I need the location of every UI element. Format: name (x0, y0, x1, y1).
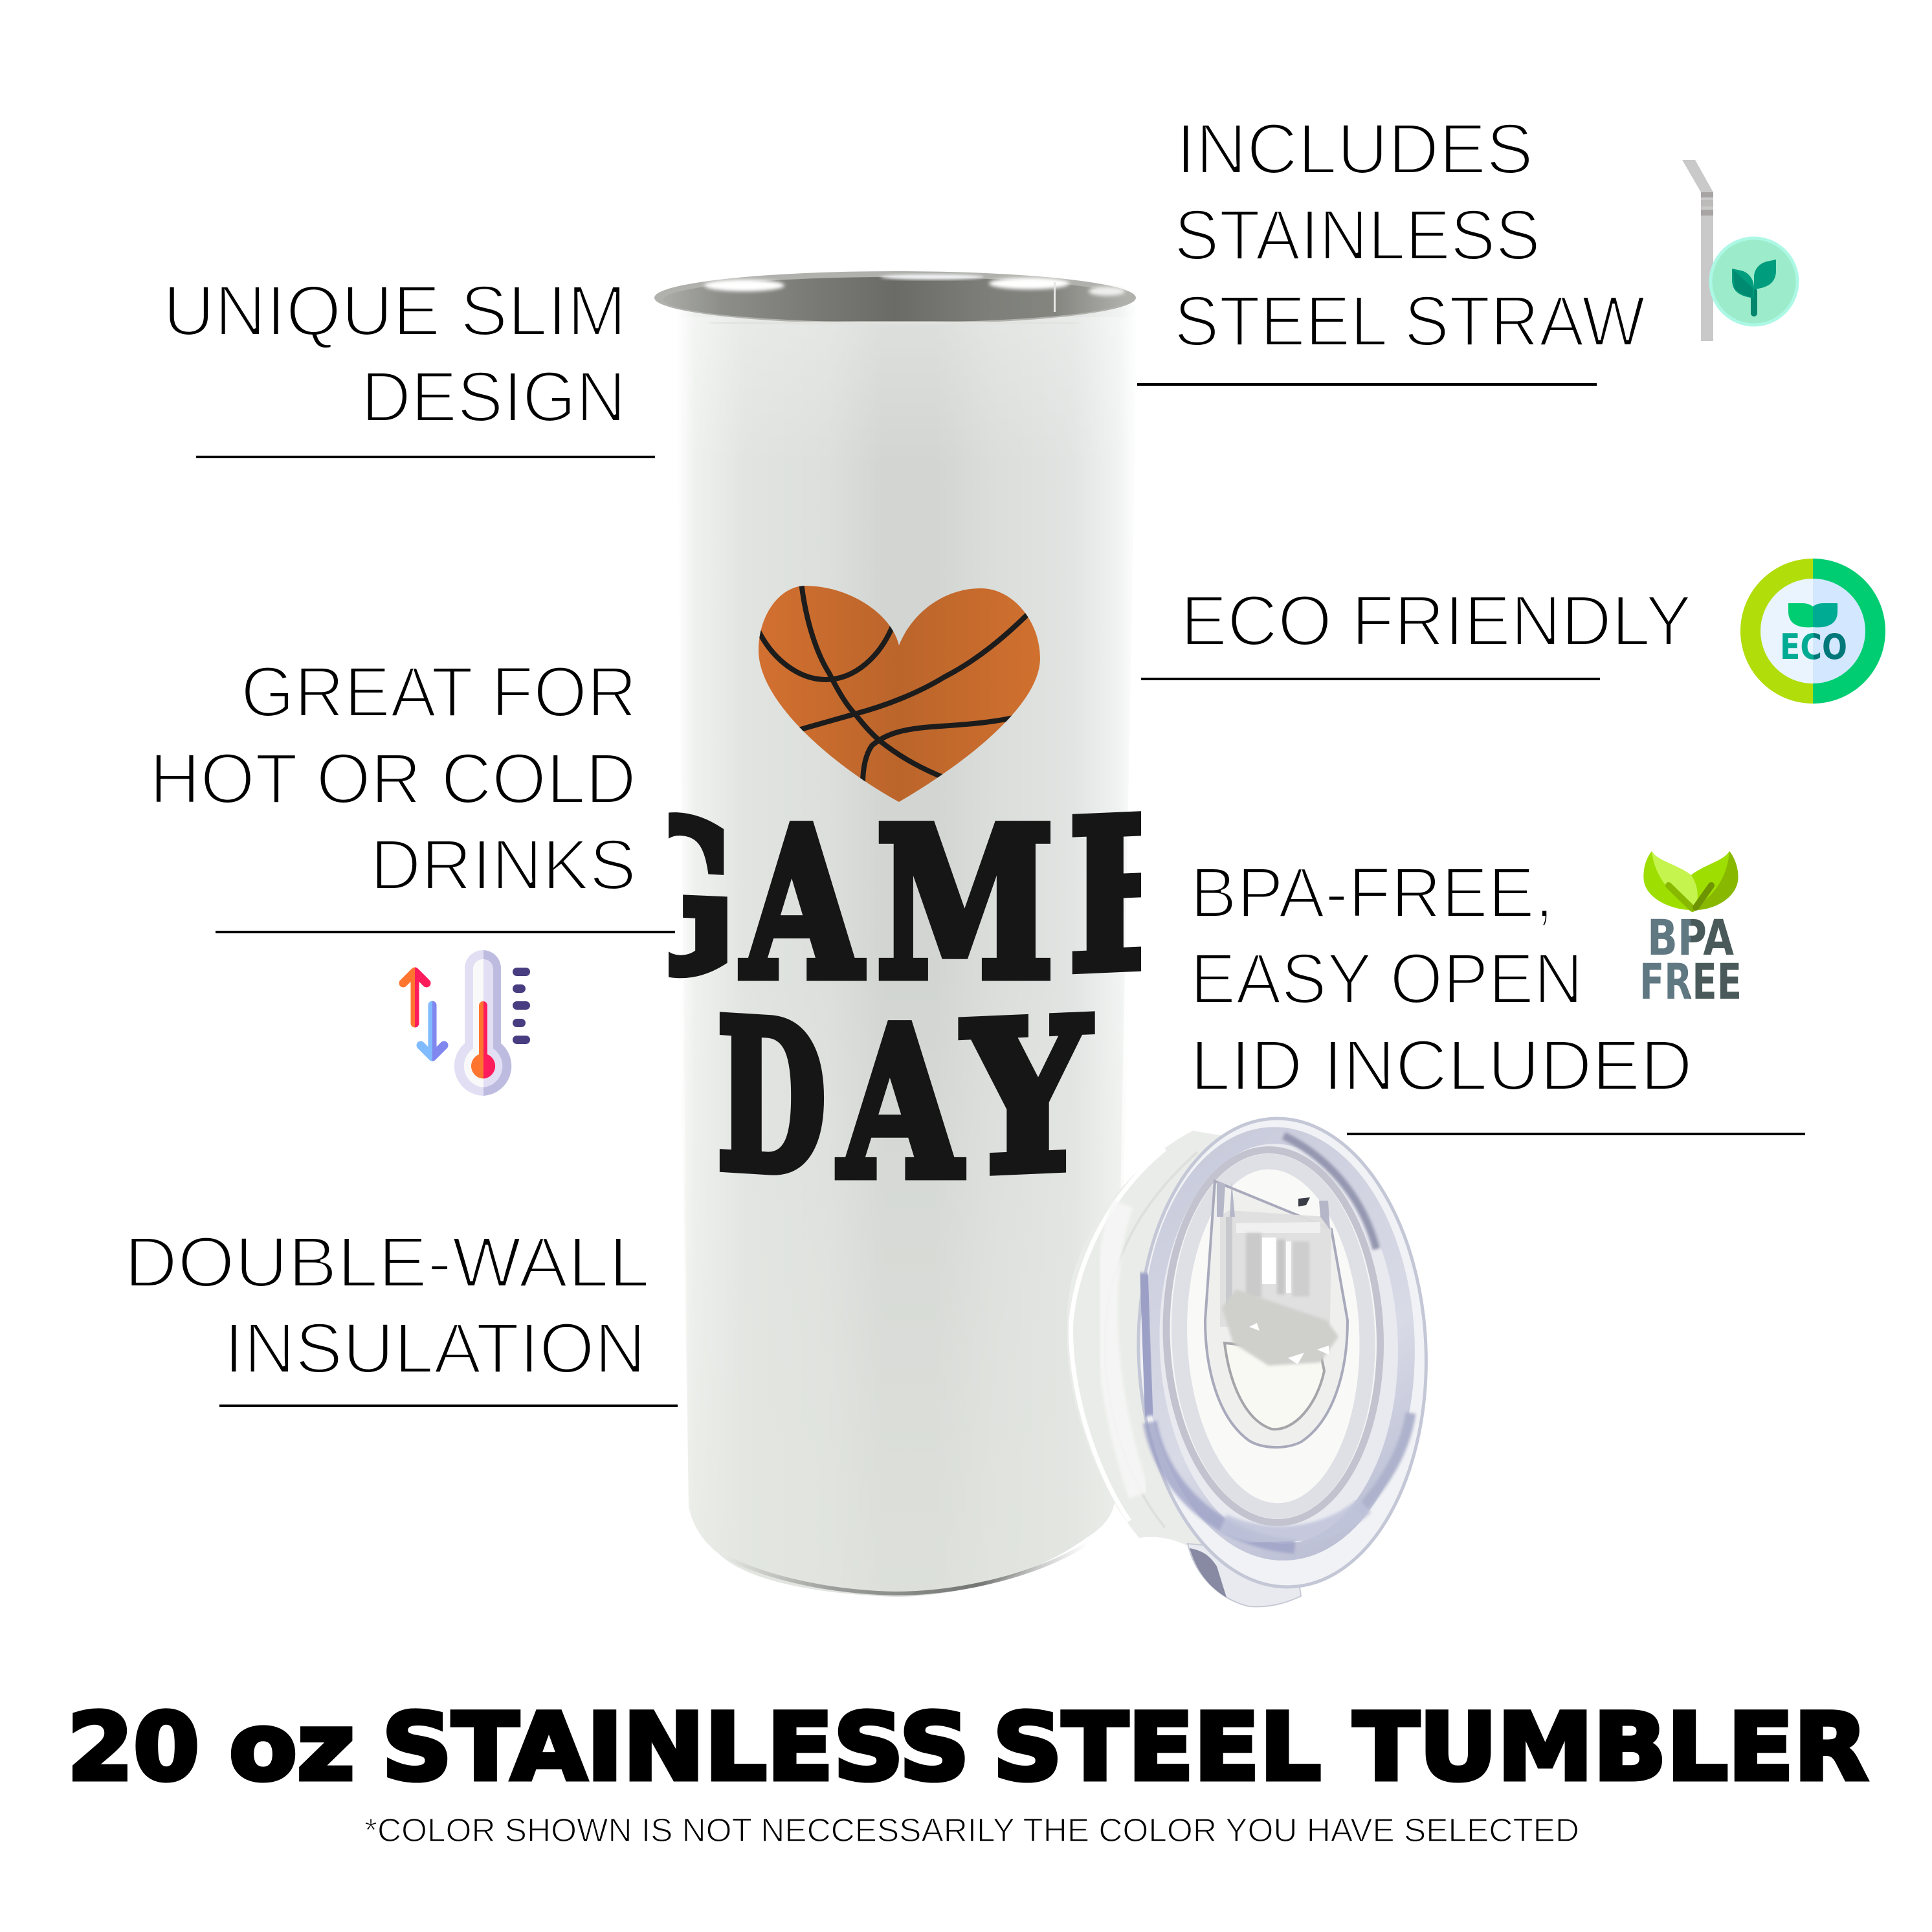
tumbler print: GAME: A (740, 783, 864, 1024)
lid tab (1188, 1544, 1301, 1606)
title: TUMBLER (1353, 1693, 1868, 1801)
callout: double-wall insulation: INSULATION (224, 1309, 646, 1388)
icon: BPA free leaves: BPA (1647, 909, 1734, 966)
lid front ring (1131, 1113, 1434, 1592)
lid sip opening (1205, 1181, 1348, 1447)
steel rim (654, 271, 1136, 325)
title: oz (229, 1693, 355, 1801)
callout: eco friendly: ECO FRIENDLY (1181, 581, 1692, 661)
callout: includes stainless steel straw (1137, 109, 1645, 386)
icon: eco badge: ECO (1780, 627, 1847, 667)
tumbler print: GAME: G (615, 775, 735, 1021)
callout: great for hot or cold drinks (150, 652, 675, 933)
tumbler body (676, 304, 1138, 1597)
callout: great for hot or cold drinks: GREAT FOR (241, 652, 637, 732)
callout: BPA-free easy open lid: EASY OPEN (1190, 939, 1583, 1019)
lid slider (1217, 1181, 1338, 1366)
callout: unique slim design: DESIGN (361, 357, 626, 437)
callout: BPA-free easy open lid: LID INCLUDED (1190, 1026, 1693, 1105)
tumbler print: GAME: E (1069, 772, 1186, 1017)
callout: BPA-free easy open lid: BPA-FREE, (1190, 853, 1554, 933)
callout: double-wall insulation (124, 1223, 678, 1407)
tumbler print: DAY: A (838, 983, 964, 1223)
callout: double-wall insulation: DOUBLE-WALL (124, 1223, 650, 1302)
title: STAINLESS (382, 1693, 970, 1801)
tumbler print: GAME (669, 811, 1141, 981)
footnote: *COLOR SHOWN IS NOT NECCESSARILY THE COLOR YOU HAVE SELECTED (364, 1812, 1579, 1849)
icon: eco badge (1740, 559, 1885, 704)
icon: BPA free leaves: FREE (1639, 953, 1742, 1010)
callout: unique slim design: UNIQUE SLIM (163, 271, 627, 351)
tumbler print: DAY: D (717, 974, 826, 1221)
lid (1067, 1113, 1434, 1606)
tumbler print: DAY: Y (962, 974, 1093, 1220)
heart basketball graphic (759, 583, 1040, 802)
callout: great for hot or cold drinks: DRINKS (370, 825, 636, 905)
callout: unique slim design (163, 271, 655, 458)
callout: great for hot or cold drinks: HOT OR COLD (150, 739, 636, 819)
tumbler print: DAY (717, 974, 1093, 1223)
title (67, 1693, 1868, 1801)
callout: includes stainless steel straw: STEEL STRAW (1174, 282, 1645, 361)
lid back skirt (1067, 1131, 1359, 1579)
title: STEEL (993, 1693, 1321, 1801)
callout: BPA-free easy open lid (1190, 853, 1805, 1135)
callout: includes stainless steel straw: INCLUDES (1176, 109, 1533, 189)
tumbler (654, 271, 1138, 1597)
icon: straw with sprout (1682, 160, 1797, 341)
icon: thermometer with arrows (403, 950, 530, 1096)
title: 20 (67, 1693, 199, 1801)
tumbler print: GAME: M (876, 783, 1054, 1024)
icon: BPA free leaves (1639, 851, 1742, 1010)
callout: includes stainless steel straw: STAINLESS (1174, 195, 1540, 275)
